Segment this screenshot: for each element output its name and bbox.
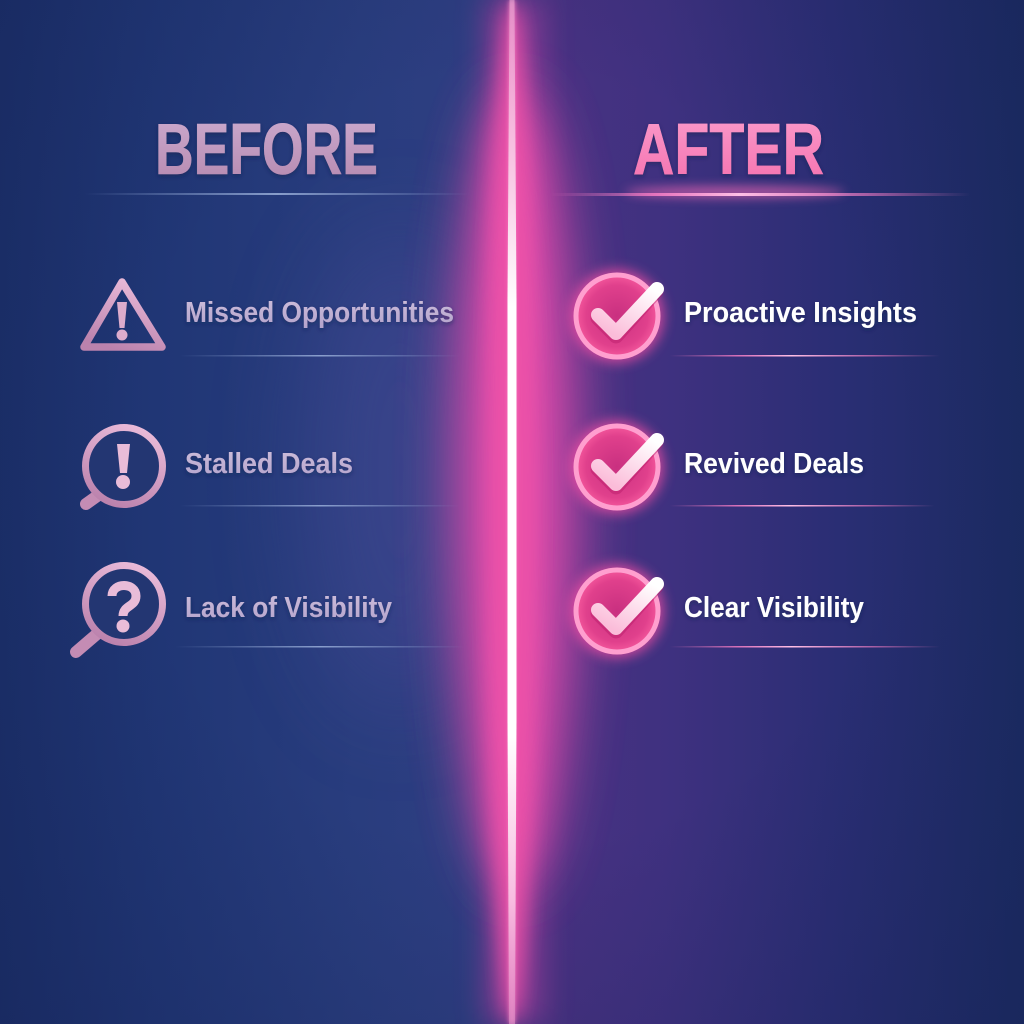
heading rule: after	[550, 186, 970, 198]
heading: BEFORE: BEFORE	[155, 110, 378, 190]
rule	[670, 505, 935, 506]
icon: magnifier with question mark	[76, 566, 162, 652]
heading rule: before	[85, 193, 470, 195]
icon: warning triangle	[84, 282, 162, 347]
label: Missed Opportunities: Missed Opportunities	[185, 297, 454, 329]
label: Revived Deals: Revived Deals	[684, 448, 864, 480]
label: Clear Visibility: Clear Visibility	[684, 592, 864, 624]
label: Proactive Insights: Proactive Insights	[684, 297, 917, 329]
icon: check circle 1	[570, 269, 664, 363]
rule	[180, 505, 460, 506]
rule	[175, 646, 465, 648]
label: Lack of Visibility: Lack of Visibility	[185, 592, 392, 624]
panel: before	[76, 282, 465, 652]
rule	[670, 355, 940, 356]
icon: check circle 2	[570, 420, 664, 514]
icon: check circle 3	[570, 564, 664, 658]
panel: after	[570, 269, 940, 658]
label: Stalled Deals: Stalled Deals	[185, 448, 353, 480]
rule	[180, 355, 460, 356]
rule	[670, 646, 940, 648]
heading: AFTER: AFTER	[633, 110, 824, 190]
icon: magnifier with exclamation	[86, 428, 162, 504]
glowing center divider	[453, 0, 577, 1024]
